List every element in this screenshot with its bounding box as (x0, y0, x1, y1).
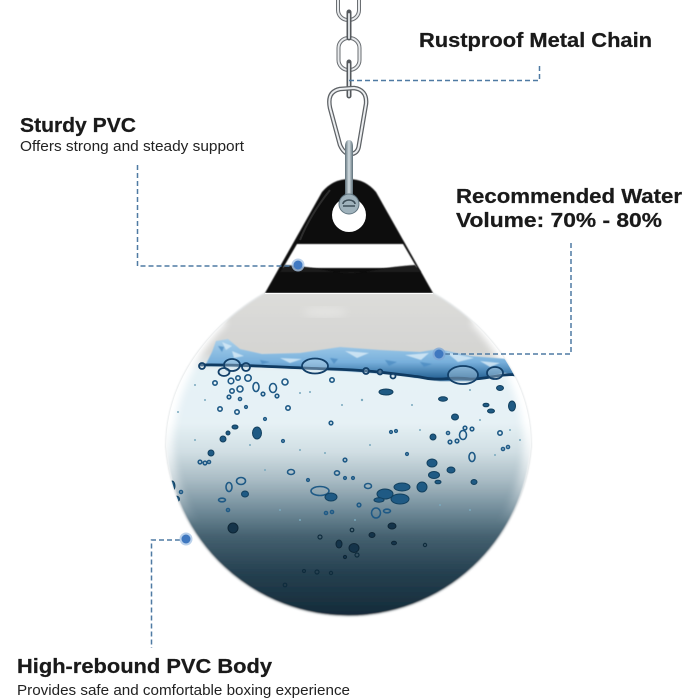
callout: rustproof metal chain (349, 30, 652, 80)
shackle and bolt (339, 140, 359, 214)
heading: Sturdy PVC (20, 115, 136, 137)
callout: high-rebound PVC body (17, 532, 350, 699)
connector line (349, 63, 540, 80)
black cone collar (265, 179, 433, 294)
heading: Rustproof Metal Chain (419, 30, 652, 52)
connector and dot (152, 532, 192, 648)
description: Offers strong and steady support (20, 138, 245, 155)
description: Provides safe and comfortable boxing experience (17, 682, 350, 699)
callout: sturdy PVC (20, 115, 304, 272)
punching bag (166, 0, 531, 616)
connector and dot (432, 240, 571, 360)
chain (338, 0, 360, 96)
heading line 2: Volume: 70% - 80% (456, 210, 662, 232)
heading: Recommended Water (456, 186, 682, 208)
connector and dot (138, 165, 304, 272)
ball body (166, 293, 531, 616)
air bubbles (169, 375, 521, 587)
carabiner (329, 88, 366, 154)
water surface (199, 339, 520, 384)
heading: High-rebound PVC Body (17, 656, 273, 678)
callout: recommended water volume (432, 186, 682, 360)
